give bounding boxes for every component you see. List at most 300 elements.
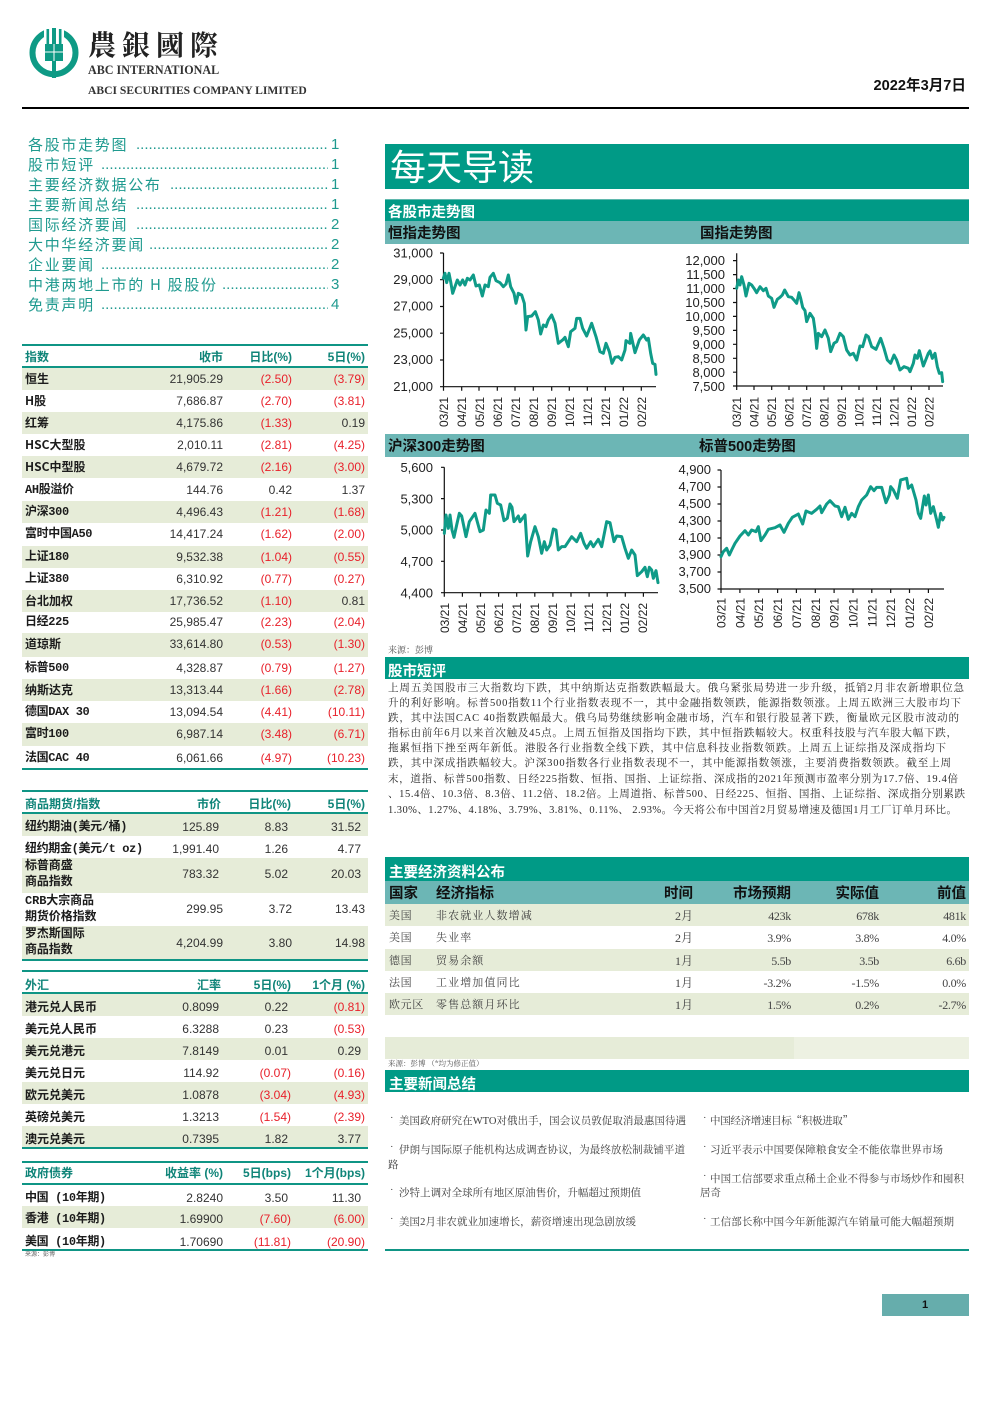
panel: economic data table: 4.0% <box>942 931 966 945</box>
chart: S&P 500 index: 4,100 <box>678 530 711 545</box>
chart: HSCEI index: 05/21 <box>765 397 779 427</box>
icon: ABC wheat emblem <box>30 28 78 78</box>
panel: forex table: (3.04) <box>260 1088 291 1102</box>
panel: forex table: 0.23 <box>265 1022 288 1036</box>
panel: forex table: 欧元兑美元 <box>25 1086 85 1103</box>
panel: economic data table: 5.5b <box>771 954 791 968</box>
commodities table header: 日比(%) <box>248 797 291 811</box>
panel: forex table: (4.93) <box>334 1088 365 1102</box>
chart: S&P 500 index: 4,900 <box>678 462 711 477</box>
panel: index table: (1.66) <box>261 683 292 697</box>
forex table header: 1个月 (%) <box>312 978 365 992</box>
chart: S&P 500 index: 05/21 <box>752 598 766 628</box>
table of contents: 3 <box>331 276 339 293</box>
panel: index table: 上证380 <box>25 572 69 586</box>
chart: Hang Seng index: 09/21 <box>545 397 559 427</box>
text block: news headlines <box>388 1113 964 1228</box>
panel: economic data table: 1月 <box>675 976 693 990</box>
panel: index table: (0.53) <box>261 637 292 651</box>
panel: index table: (2.81) <box>261 438 292 452</box>
table of contents: 2 <box>331 216 339 233</box>
panel: economic data table: 2月 <box>675 931 693 945</box>
chart: S&P 500 index: 10/21 <box>846 598 860 628</box>
table of contents: 主要经济数据公布 <box>28 174 162 195</box>
chart headings row 2: 沪深300走势图 <box>388 439 485 455</box>
panel: forex table: (0.53) <box>334 1022 365 1036</box>
forex table header <box>25 978 365 992</box>
panel: economic data table: 3.8% <box>855 931 879 945</box>
panel: index table: (1.33) <box>261 416 292 430</box>
panel: economic data table: 0.0% <box>942 976 966 990</box>
panel: index table: HSC中型股 <box>25 458 85 475</box>
panel: index table: 144.76 <box>186 483 223 497</box>
panel: index table: 沪深300 <box>25 505 69 519</box>
panel: commodities table: 4.77 <box>338 842 361 856</box>
chart: S&P 500 index: 4,500 <box>678 496 711 511</box>
chart: HSCEI index: 11,000 <box>686 281 725 296</box>
text block: market commentary: 末，道指、标普500指数、日经225指数、恒指、国指、上证综指、深成指的2021年预测市盈率分别为17.7倍、19.4倍 <box>388 772 958 785</box>
chart: Hang Seng index: 04/21 <box>455 397 469 427</box>
panel: forex table: 6.3288 <box>182 1022 219 1036</box>
panel: index table: 6,987.14 <box>176 727 223 741</box>
chart: S&P 500 index: 01/22 <box>903 598 917 628</box>
chart: Hang Seng index: 11/21 <box>581 397 595 426</box>
panel: index table: 4,175.86 <box>176 416 223 430</box>
chart: CSI 300 index: 03/21 <box>438 603 452 633</box>
chart: S&P 500 index: 09/21 <box>828 598 842 628</box>
table of contents: 2 <box>331 236 339 253</box>
panel: index table: 1.37 <box>342 483 365 497</box>
text block: market commentary: 上周五美国股市三大指数均下跌，其中纳斯达克指数跌幅最大。俄乌紧张局势进一步升级，抵销2月非农新增职位急 <box>388 681 964 694</box>
panel: forex table: 港元兑人民币 <box>25 998 97 1015</box>
panel: economic data table: 失业率 <box>436 932 472 944</box>
chart: HSCEI index: 02/22 <box>922 397 936 427</box>
panel: forex table: 114.92 <box>183 1066 219 1080</box>
panel: government bonds table: 1.70690 <box>180 1235 223 1249</box>
panel: commodities table: 20.03 <box>331 867 361 881</box>
text block: market commentary: 、15.4倍、10.3倍、8.3倍、11.2倍、18.2倍。上周道指、标普500、日经225、恒指、国指、上证综指、深成指分别累跌 <box>388 787 966 800</box>
panel: economic data table: 欧元区 <box>389 999 424 1011</box>
table of contents: 国际经济要闻 <box>28 214 128 235</box>
panel: index table: 25,985.47 <box>170 615 223 629</box>
panel: economic data table: 3.5b <box>859 954 879 968</box>
forex table header: 外汇 <box>25 978 49 992</box>
chart: CSI 300 index: 4,700 <box>400 554 433 569</box>
panel: economic data table <box>385 857 969 1059</box>
page title banner <box>385 144 969 189</box>
panel: forex table: 0.22 <box>265 1000 288 1014</box>
panel: index table: (2.23) <box>261 615 292 629</box>
bonds table header: 1个月(bps) <box>305 1166 365 1180</box>
chart: S&P 500 index: 3,900 <box>678 547 711 562</box>
chart: HSCEI index: 03/21 <box>730 397 744 427</box>
table of contents <box>28 134 339 315</box>
table of contents: 1 <box>331 196 339 213</box>
text block: news headlines: 中国经济增速目标“积极进取” <box>710 1113 853 1128</box>
panel: forex table: (2.39) <box>334 1110 365 1124</box>
panel: index table: 9,532.38 <box>176 550 223 564</box>
panel: commodities table: 8.83 <box>265 820 288 834</box>
panel: economic data table: 6.6b <box>946 954 966 968</box>
panel: government bonds table: 1.69900 <box>180 1212 223 1226</box>
chart: S&P 500 index: 02/22 <box>922 598 936 628</box>
bonds table header: 政府债券 <box>25 1166 73 1180</box>
bonds table header: 收益率 (%) <box>165 1166 223 1180</box>
panel: economic data table: -1.5% <box>852 976 879 990</box>
panel: economic data table: -3.2% <box>764 976 791 990</box>
panel: economic data table: 423k <box>768 909 791 923</box>
table of contents: 4 <box>331 296 339 313</box>
chart: Hang Seng index: 21,000 <box>393 379 433 394</box>
logo English name: ABC INTERNATIONAL <box>88 63 219 77</box>
table of contents: 各股市走势图 <box>28 134 128 155</box>
panel: index table: 14,417.24 <box>170 527 223 541</box>
chart: HSCEI index: 07/21 <box>800 397 814 427</box>
panel: index table: 0.81 <box>342 594 365 608</box>
chart headings row 2: 标普500走势图 <box>699 439 796 455</box>
panel: commodities table: 1,991.40 <box>172 842 219 856</box>
panel: commodities table: 1.26 <box>265 842 288 856</box>
panel: government bonds table: (6.00) <box>334 1212 365 1226</box>
text block: news headlines: ˙ <box>390 1145 394 1156</box>
section heading: market charts <box>385 199 969 221</box>
panel: index table: H股 <box>25 392 46 409</box>
chart: CSI 300 index: 06/21 <box>492 603 506 633</box>
panel: forex table: 澳元兑美元 <box>25 1130 85 1147</box>
panel: index table: 富时中国A50 <box>25 527 92 541</box>
panel: forex table: 1.0878 <box>182 1088 219 1102</box>
panel: index table: 富时100 <box>25 727 69 741</box>
panel: index table: (1.10) <box>261 594 292 608</box>
table of contents: 1 <box>331 176 339 193</box>
panel: commodities table <box>22 790 368 961</box>
table of contents: 大中华经济要闻 <box>28 234 145 255</box>
table of contents: 主要新闻总结 <box>28 194 128 215</box>
logo <box>30 24 307 97</box>
economic data column headers: 经济指标 <box>436 886 494 902</box>
panel: economic data table: 678k <box>856 909 879 923</box>
table of contents: 企业要闻 <box>28 254 95 275</box>
panel: forex table: 0.01 <box>265 1044 288 1058</box>
chart: S&P 500 index: 07/21 <box>790 598 804 628</box>
chart: Hang Seng index: 05/21 <box>473 397 487 427</box>
page number box: 1 <box>922 1299 928 1311</box>
text block: news headlines: 沙特上调对全球所有地区原油售价，升幅超过预期值 <box>399 1186 642 1199</box>
panel: index table: AH股溢价 <box>25 483 74 497</box>
panel: economic data table: 1.5% <box>767 998 791 1012</box>
panel: economic data table: 法国 <box>389 977 412 989</box>
panel: index table: (1.21) <box>261 505 292 519</box>
panel: index table: (0.77) <box>261 572 292 586</box>
chart: HSCEI index: 11/21 <box>870 397 884 426</box>
panel: economic data table: 工业增加值同比 <box>436 977 521 989</box>
chart: HSCEI index <box>685 253 944 427</box>
chart: HSCEI index: 9,000 <box>692 337 725 352</box>
panel: index table: (3.81) <box>334 394 365 408</box>
panel: index table: (1.68) <box>334 505 365 519</box>
chart: HSCEI index: 11,500 <box>686 267 725 282</box>
panel: index table: (2.78) <box>334 683 365 697</box>
panel: forex table: 0.8099 <box>182 1000 219 1014</box>
chart: Hang Seng index: 08/21 <box>527 397 541 427</box>
panel: commodities table: 14.98 <box>335 936 365 950</box>
panel: forex table: 0.29 <box>338 1044 361 1058</box>
chart: CSI 300 index: 04/21 <box>456 603 470 633</box>
chart: CSI 300 index: 05/21 <box>474 603 488 633</box>
panel: forex table: (0.16) <box>334 1066 365 1080</box>
panel: economic data table: 非农就业人数增减 <box>436 910 533 922</box>
bonds table header <box>25 1166 365 1180</box>
panel: government bonds table: (20.90) <box>327 1235 365 1249</box>
chart: CSI 300 index: 01/22 <box>618 603 632 633</box>
text block: news headlines: ˙ <box>703 1145 706 1156</box>
commodities table header <box>25 797 365 811</box>
table of contents: 中港两地上市的 H 股股份 <box>28 274 218 295</box>
panel: economic data table: 481k <box>943 909 966 923</box>
chart: S&P 500 index: 08/21 <box>809 598 823 628</box>
panel: government bonds table: 3.50 <box>265 1191 288 1205</box>
commodities table header: 5日(%) <box>328 797 365 811</box>
chart: CSI 300 index: 10/21 <box>564 603 578 633</box>
panel: index table: 13,313.44 <box>170 683 223 697</box>
panel: index table: (1.27) <box>334 661 365 675</box>
economic data column headers: 市场预期 <box>733 886 791 902</box>
panel: index table: (0.79) <box>261 661 292 675</box>
panel: commodities table: 4,204.99 <box>176 936 223 950</box>
economic data column headers: 时间 <box>664 886 693 902</box>
panel: government bonds table: 2.8240 <box>186 1191 223 1205</box>
panel: index table: (1.30) <box>334 637 365 651</box>
panel: index table: 0.42 <box>269 483 292 497</box>
text block: news headlines: 路 <box>388 1158 399 1171</box>
index table header: 日比(%) <box>249 350 292 364</box>
text block: market commentary: 指标由前年6月以来首次触及45点。上周五恒指及国指均下跌，其中恒指跌幅较大。权重科技股与汽车股大幅下跌， <box>388 726 957 739</box>
chart: HSCEI index: 10,000 <box>685 309 725 324</box>
panel: forex table: 美元兑日元 <box>25 1064 85 1081</box>
text block: market commentary <box>388 681 966 816</box>
panel: commodities table: 3.72 <box>269 902 292 916</box>
economic data heading: 主要经济资料公布 <box>389 861 505 882</box>
section heading: news summary: 主要新闻总结 <box>389 1073 476 1094</box>
commodities table header: 市价 <box>197 797 221 811</box>
chart: HSCEI index: 09/21 <box>835 397 849 427</box>
economic data source note: 来源：彭博 （*均为修正值） <box>388 1058 484 1069</box>
panel: forex table: (0.07) <box>260 1066 291 1080</box>
panel: forex table: 7.8149 <box>182 1044 219 1058</box>
panel: index table: 恒生 <box>25 370 49 387</box>
panel: index table: 6,061.66 <box>176 751 223 765</box>
panel: commodities table: 5.02 <box>265 867 288 881</box>
panel: index table: 德国DAX 30 <box>25 705 89 719</box>
panel: commodities table: 299.95 <box>186 902 223 916</box>
chart: CSI 300 index: 4,400 <box>400 585 433 600</box>
chart: Hang Seng index: 02/22 <box>635 397 649 427</box>
text block: news headlines: ˙ <box>703 1116 706 1127</box>
panel: commodities table: 期货价格指数 <box>25 910 96 924</box>
panel: index table: 33,614.80 <box>170 637 223 651</box>
chart: Hang Seng index: 01/22 <box>617 397 631 427</box>
panel: government bonds table: (7.60) <box>260 1212 291 1226</box>
chart: Hang Seng index: 06/21 <box>491 397 505 427</box>
panel: index table: (10.23) <box>327 751 365 765</box>
panel: commodities table: 商品指数 <box>25 942 73 956</box>
panel: index table: 4,679.72 <box>176 460 223 474</box>
economic data heading <box>385 857 969 881</box>
text block: market commentary: 升的利好影响。标普500指数11个行业指数表现不一，其中金融指数领跌，能源指数领涨。上周五欧洲三大股市均下 <box>388 696 962 709</box>
chart: HSCEI index: 9,500 <box>692 323 725 338</box>
panel: commodities table: 3.80 <box>269 936 292 950</box>
text block: news headlines: ˙ <box>390 1116 394 1127</box>
table of contents: 股市短评 <box>28 154 95 175</box>
text block: news headlines: ˙ <box>703 1217 706 1228</box>
index table header: 指数 <box>25 350 49 364</box>
panel: economic data table: 贸易余额 <box>436 955 484 967</box>
chart headings row 1: 恒指走势图 <box>388 226 460 242</box>
chart: HSCEI index: 06/21 <box>782 397 796 427</box>
panel: government bonds table <box>22 1161 368 1258</box>
chart: Hang Seng index: 27,000 <box>393 298 433 314</box>
chart: HSCEI index: 8,000 <box>692 365 725 380</box>
economic data column headers: 国家 <box>389 886 418 902</box>
panel: index table: 4,328.87 <box>176 661 223 675</box>
panel: index table: 17,736.52 <box>170 594 223 608</box>
chart: HSCEI index: 12/21 <box>888 397 902 427</box>
text block: news headlines: 伊朗与国际原子能机构达成调查协议，为最终放松制裁铺平道 <box>399 1143 686 1156</box>
text block: news headlines: 习近平表示中国要保障粮食安全不能依靠世界市场 <box>710 1143 944 1156</box>
panel: index table: 纳斯达克 <box>25 681 73 698</box>
panel: index table: 上证180 <box>25 550 69 564</box>
chart: S&P 500 index: 4,700 <box>678 479 711 494</box>
panel: commodities table: CRB大宗商品 <box>25 894 94 908</box>
panel: index table: (4.25) <box>334 438 365 452</box>
index table header: 收市 <box>199 350 223 364</box>
panel: commodities table: 罗杰斯国际 <box>25 927 85 941</box>
chart: CSI 300 index: 5,000 <box>400 523 433 538</box>
section heading: news summary <box>385 1070 969 1092</box>
chart: S&P 500 index: 3,700 <box>678 564 711 579</box>
panel: government bonds table: 中国 (10年期) <box>25 1191 106 1205</box>
chart: CSI 300 index: 5,600 <box>400 460 433 475</box>
panel: commodities table: 783.32 <box>182 867 219 881</box>
panel: forex table: 0.7395 <box>182 1132 219 1146</box>
section heading: market charts: 各股市走势图 <box>388 201 475 222</box>
table of contents: 2 <box>331 256 339 273</box>
logo Chinese name: 農銀國際 <box>88 24 224 64</box>
panel: index table: (2.70) <box>261 394 292 408</box>
chart: S&P 500 index <box>678 462 946 628</box>
panel: commodities table: 纽约期金(美元/t oz) <box>25 842 143 856</box>
panel: index table: (0.27) <box>334 572 365 586</box>
chart: HSCEI index: 10/21 <box>852 397 866 427</box>
page number box <box>882 1294 969 1316</box>
table of contents: 1 <box>331 136 339 153</box>
chart: CSI 300 index: 07/21 <box>510 603 524 633</box>
panel: index table: 台北加权 <box>25 592 73 609</box>
panel: index table: (6.71) <box>334 727 365 741</box>
chart: S&P 500 index: 11/21 <box>865 598 879 627</box>
panel: government bonds table: (11.81) <box>254 1235 291 1249</box>
chart: HSCEI index: 08/21 <box>818 397 832 427</box>
chart: CSI 300 index: 09/21 <box>546 603 560 633</box>
panel: economic data table: 1月 <box>675 998 693 1012</box>
text block: news headlines: 工信部长称中国今年新能源汽车销量可能大幅超预期 <box>710 1215 954 1228</box>
panel: index table: 7,686.87 <box>176 394 223 408</box>
panel: index table <box>22 344 368 770</box>
chart: Hang Seng index: 31,000 <box>393 246 433 260</box>
chart: S&P 500 index: 3,500 <box>678 581 711 596</box>
panel: commodities table: 商品指数 <box>25 874 73 888</box>
chart: CSI 300 index <box>400 460 660 633</box>
panel: index table: (2.00) <box>334 527 365 541</box>
chart: S&P 500 index: 04/21 <box>733 598 747 628</box>
text block: news headlines: ˙ <box>390 1188 394 1199</box>
panel: index table: 日经225 <box>25 615 69 629</box>
panel: government bonds table: 11.30 <box>332 1191 361 1205</box>
panel: government bonds table: 香港 (10年期) <box>25 1212 106 1226</box>
table of contents: 免责声明 <box>28 294 95 315</box>
commodities table header: 商品期货/指数 <box>25 797 100 811</box>
report date: 2022年3月7日 <box>874 78 966 94</box>
bonds table header: 5日(bps) <box>243 1166 291 1180</box>
panel: index table: 0.19 <box>342 416 365 430</box>
panel: index table: (3.79) <box>334 372 365 386</box>
section heading: market commentary <box>385 657 969 679</box>
panel: index table: 2,010.11 <box>177 438 223 452</box>
panel: index table: 4,496.43 <box>176 505 223 519</box>
panel: commodities table: 纽约期油(美元/桶) <box>25 820 127 834</box>
chart: S&P 500 index: 06/21 <box>771 598 785 628</box>
text block: news headlines: ˙ <box>703 1174 706 1185</box>
panel: index table: (2.04) <box>334 615 365 629</box>
panel: index table: (3.48) <box>261 727 292 741</box>
chart: Hang Seng index: 03/21 <box>437 397 451 427</box>
chart headings row 2 <box>385 434 969 457</box>
forex table header: 汇率 <box>197 978 221 992</box>
panel: index table: (0.55) <box>334 550 365 564</box>
panel: index table: 21,905.29 <box>170 372 223 386</box>
panel: index table: 道琼斯 <box>25 635 61 652</box>
panel: economic data table: 美国 <box>389 932 412 944</box>
chart: HSCEI index: 01/22 <box>905 397 919 427</box>
text block: market commentary: 拖累恒指下挫至两年新低。港股各行业指数全线下跌，其中信息科技业指数领跌。上周五上证综指及深成指均下 <box>388 741 946 754</box>
panel: forex table: 英磅兑美元 <box>25 1108 85 1125</box>
panel: index table: 法国CAC 40 <box>25 751 89 765</box>
chart: HSCEI index: 04/21 <box>748 397 762 427</box>
chart: S&P 500 index: 03/21 <box>714 598 728 628</box>
panel: forex table: 3.77 <box>338 1132 361 1146</box>
panel: commodities table: 125.89 <box>182 820 219 834</box>
panel: forex table: 1.82 <box>265 1132 288 1146</box>
chart: HSCEI index: 10,500 <box>685 295 725 310</box>
page title banner: 每天导读 <box>390 139 534 191</box>
chart: S&P 500 index: 12/21 <box>884 598 898 628</box>
panel: economic data table: -2.7% <box>938 998 966 1012</box>
panel: economic data table: 美国 <box>389 910 412 922</box>
chart: HSCEI index: 8,500 <box>692 351 725 366</box>
panel: forex table: (0.81) <box>334 1000 365 1014</box>
text block: market commentary: 跌，其中法国CAC 40指数跌幅最大。俄乌局势继续影响金融市场，汽车和银行股显著下跌，衡量欧元区股市波动的 <box>388 711 960 724</box>
chart: Hang Seng index: 07/21 <box>509 397 523 427</box>
chart: CSI 300 index: 11/21 <box>582 603 596 632</box>
text block: market commentary: 1.30%、1.27%、4.18%、3.79%、3.81%、0.11%、 2.93%。今天将公布中国首2月贸易增速及德国1月工厂订单月环比。 <box>388 803 957 816</box>
index table header: 5日(%) <box>328 350 365 364</box>
panel: government bonds table: 美国 (10年期) <box>25 1235 106 1249</box>
chart: HSCEI index: 7,500 <box>692 379 725 394</box>
chart: Hang Seng index: 29,000 <box>393 272 433 287</box>
panel: index table: (3.00) <box>334 460 365 474</box>
chart: Hang Seng index: 23,000 <box>393 352 433 367</box>
panel: index table: (10.11) <box>328 705 365 719</box>
